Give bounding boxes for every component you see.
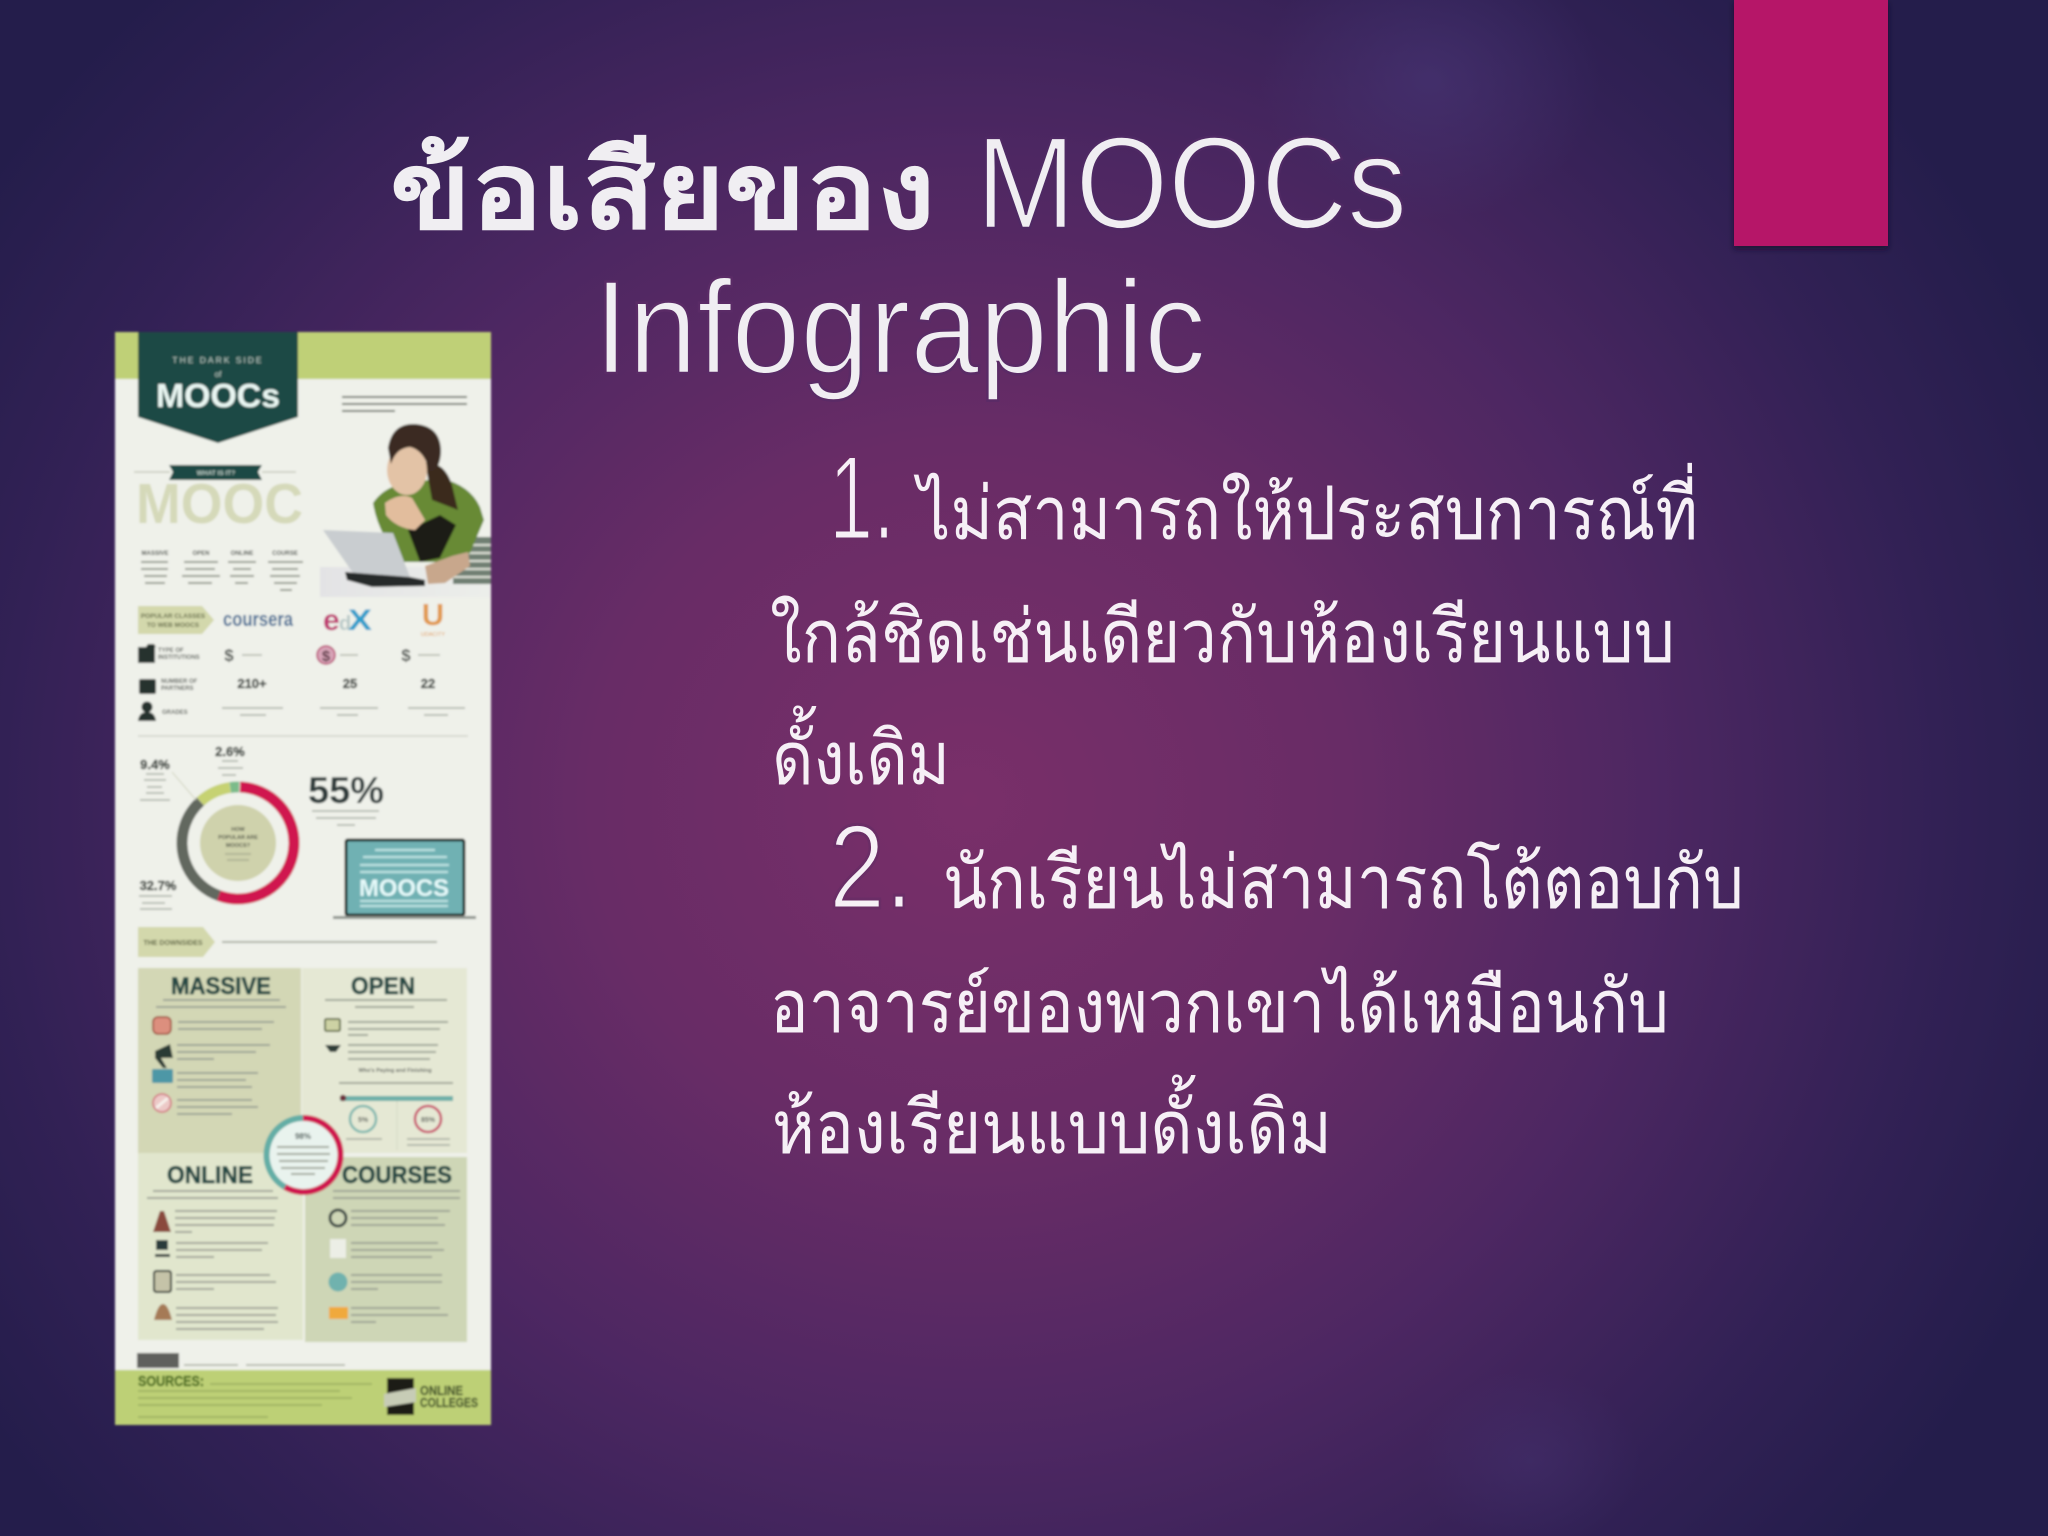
donut chart: how popular are MOOCs: MOOCS? <box>226 843 251 849</box>
header banner: THE DARK SIDE <box>172 355 264 365</box>
comparison table: type of institutions: $ <box>224 646 234 665</box>
icon: screen <box>152 1069 173 1083</box>
panel: open: OPEN <box>351 973 415 1000</box>
point 1: 1. <box>829 431 895 565</box>
icon: envelope <box>329 1307 348 1319</box>
comparison table: type of institutions: $ <box>322 648 331 665</box>
small ring: 5% <box>350 1106 376 1132</box>
creative commons badge <box>137 1353 179 1368</box>
point 1: ไม่สามารถให้ประสบการณ์ที่ <box>914 462 1698 555</box>
intro paragraph <box>342 397 467 411</box>
icon: globe <box>328 1272 348 1292</box>
point 1 <box>770 431 1698 800</box>
header banner <box>138 332 298 443</box>
ribbon: what is it <box>134 465 296 480</box>
bottom green band <box>115 1370 491 1425</box>
sources <box>138 1373 372 1417</box>
logo: Udacity: U <box>422 597 444 632</box>
logo: edX <box>323 604 372 637</box>
panel: courses: COURSES <box>342 1162 452 1189</box>
panel: online: ONLINE <box>167 1162 253 1189</box>
Online Colleges logo: ONLINE <box>420 1383 463 1398</box>
small ring: 5%: 5% <box>358 1117 369 1124</box>
ribbon: what is it: WHAT IS IT? <box>197 470 235 477</box>
header banner: of <box>215 370 222 379</box>
four definition columns <box>141 551 303 590</box>
point 1: ดั้งเดิม <box>772 705 950 800</box>
point 2: อาจารย์ของพวกเขาได้เหมือนกับ <box>770 965 1669 1048</box>
comparison table: number of partners <box>139 676 435 694</box>
license note <box>184 1364 345 1366</box>
point 2: 2. <box>829 800 913 934</box>
divider <box>138 735 468 737</box>
timeline bar <box>340 1095 453 1101</box>
poster background <box>115 332 491 1425</box>
header banner: MOOCs <box>156 377 280 414</box>
flag caption <box>222 941 437 943</box>
small ring: 85%: 85% <box>421 1117 436 1124</box>
panel: massive: MASSIVE <box>171 973 271 1000</box>
stat 55%: 55% <box>308 770 384 811</box>
laptop graphic <box>333 840 476 919</box>
comparison table: number of partners: 22 <box>421 676 435 691</box>
title: ข้อเสียของ <box>390 130 935 251</box>
logo: edX: e <box>323 604 340 637</box>
ring callout: 98%: 98% <box>295 1132 311 1141</box>
panel: online <box>138 1153 303 1340</box>
pink accent rectangle <box>1734 0 1888 246</box>
comparison table: number of partners: 25 <box>343 676 357 691</box>
icon: recycle arrows <box>330 1210 346 1226</box>
icon: users <box>155 1240 170 1257</box>
icon: tablet <box>325 1019 340 1031</box>
four definition columns: ONLINE <box>231 551 253 557</box>
ring callout: 98% <box>266 1118 341 1192</box>
stat 9.4% <box>140 757 196 800</box>
donut chart: how popular are MOOCs <box>159 764 317 922</box>
laptop graphic: MOOCS <box>359 875 449 902</box>
icon: megaphone <box>155 1044 173 1068</box>
icon: person at desk <box>154 1304 172 1320</box>
stat 2.6% <box>215 744 245 775</box>
comparison table: number of partners: PARTNERS <box>161 686 194 692</box>
Online Colleges logo: COLLEGES <box>420 1395 478 1410</box>
comparison table: type of institutions: TYPE OF <box>158 648 184 654</box>
top green band <box>115 332 491 379</box>
logo: edX: X <box>348 604 372 637</box>
four definition columns: OPEN <box>192 551 210 557</box>
icon: science flask <box>153 1211 171 1232</box>
point 1: ใกล้ชิดเช่นเดียวกับห้องเรียนแบบ <box>770 595 1675 678</box>
sources: SOURCES: <box>138 1373 204 1390</box>
comparison table: grades: GRADES <box>162 710 188 716</box>
four definition columns: COURSE <box>272 551 298 557</box>
big MOOC word: MOOC <box>136 472 303 536</box>
panel: open <box>302 968 467 1153</box>
logo: Udacity: UDACITY <box>421 632 445 638</box>
icon: video <box>153 1017 171 1034</box>
donut chart: how popular are MOOCs: HOW <box>231 827 246 833</box>
comparison table: type of institutions <box>138 644 440 665</box>
flag: the downsides <box>138 927 215 957</box>
icon: no symbol <box>153 1094 171 1112</box>
body text: numbered disadvantages <box>770 431 1744 1169</box>
title <box>390 109 1407 402</box>
stat 2.6%: 2.6% <box>215 744 245 759</box>
flag: popular classes: POPULAR CLASSES <box>141 613 206 620</box>
stat 32.7% <box>139 878 177 909</box>
comparison table: type of institutions: $ <box>401 646 411 665</box>
photo: student with laptop <box>320 424 491 597</box>
comparison table: type of institutions: INSTITUTIONS <box>158 655 200 661</box>
logo: edX: d <box>339 613 351 635</box>
title: MOOCs <box>976 109 1407 256</box>
title: Infographic <box>594 254 1206 402</box>
stat 32.7%: 32.7% <box>140 878 177 893</box>
comparison table: grades <box>138 702 465 721</box>
four definition columns: MASSIVE <box>141 551 169 557</box>
donut chart: how popular are MOOCs: POPULAR ARE <box>218 835 258 841</box>
panel: massive <box>138 968 301 1153</box>
icon: graduation cap <box>325 1045 341 1052</box>
Online Colleges logo <box>384 1378 478 1415</box>
panel: courses <box>305 1157 467 1342</box>
icon: document <box>330 1239 346 1258</box>
small ring: 85% <box>415 1106 441 1132</box>
comparison table: number of partners: NUMBER OF <box>161 679 198 685</box>
point 2: ห้องเรียนแบบดั้งเดิม <box>772 1074 1332 1169</box>
flag: popular classes: TO WEB MOOCS <box>147 622 200 629</box>
embedded infographic: The Dark Side of MOOCs <box>115 332 491 1425</box>
point 2: นักเรียนไม่สามารถโต้ตอบกับ <box>943 841 1744 924</box>
logo: coursera: coursera <box>223 609 294 631</box>
comparison table: number of partners: 210+ <box>237 676 267 691</box>
flag: popular classes <box>138 606 214 634</box>
point 2 <box>770 800 1744 1169</box>
flag: the downsides: THE DOWNSIDES <box>143 940 203 947</box>
stat 9.4%: 9.4% <box>140 757 170 772</box>
icon: tablet <box>154 1271 171 1292</box>
panel: open: Who's Paying and Finishing <box>358 1068 432 1074</box>
